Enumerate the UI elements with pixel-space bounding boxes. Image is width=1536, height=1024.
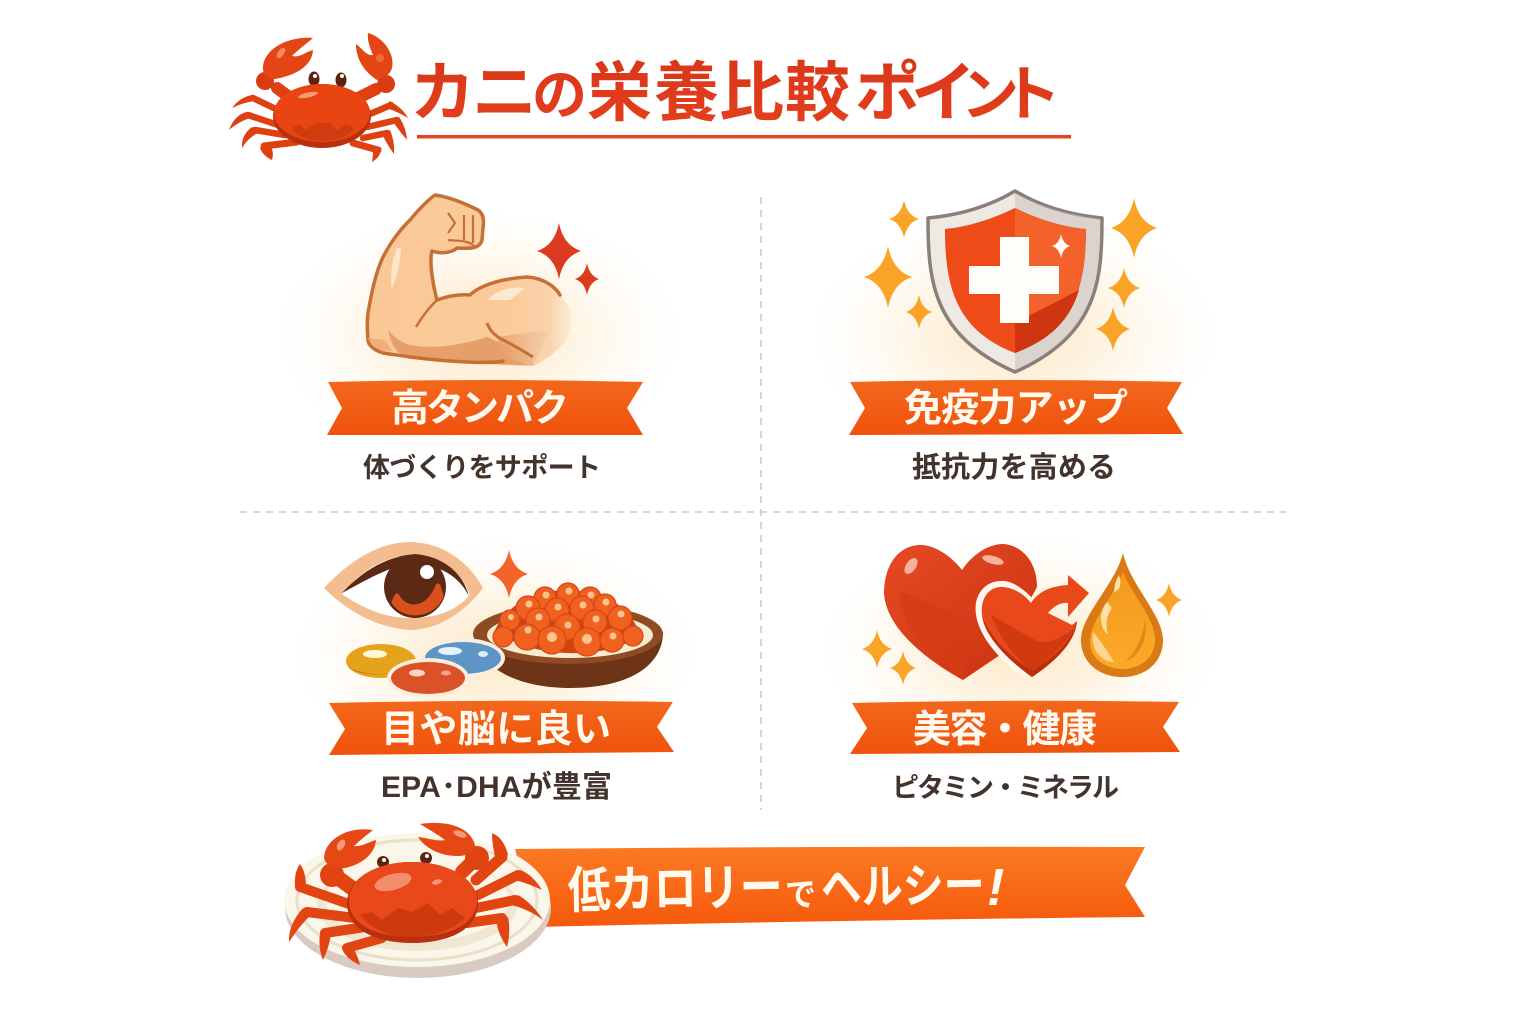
title: の bbox=[532, 64, 587, 126]
section glows bbox=[260, 200, 1235, 780]
icon: ikura bowl bbox=[473, 583, 663, 688]
ribbon: beauty and health bbox=[850, 701, 1180, 754]
ribbon: beauty and health: 美容・健康 bbox=[913, 709, 1097, 751]
title: カニ bbox=[410, 56, 537, 129]
caption: 体づくりをサポート bbox=[363, 453, 601, 483]
banner text: で bbox=[785, 876, 816, 913]
title: 栄養比較ポイ bbox=[587, 56, 976, 129]
panel: eyes and brain bbox=[324, 542, 674, 804]
banner text: ! bbox=[987, 859, 1004, 917]
icon: small heart with arrow bbox=[976, 575, 1089, 678]
icon: supplement capsules bbox=[346, 638, 505, 698]
bottom banner: low calorie bbox=[284, 823, 1145, 978]
banner text: 低カロリー bbox=[567, 859, 783, 919]
icon: sparkle bbox=[490, 550, 528, 598]
icon: sparkles bbox=[864, 198, 1157, 351]
panel: immunity bbox=[849, 191, 1183, 484]
header crab icon bbox=[229, 33, 408, 162]
ribbon: high protein: 高タンパク bbox=[391, 388, 569, 430]
ribbon: high protein bbox=[327, 380, 643, 435]
caption: 抵抗力を高める bbox=[912, 451, 1116, 484]
icon: eye bbox=[324, 542, 483, 630]
crab bbox=[289, 823, 543, 965]
ribbon: eyes and brain bbox=[329, 701, 674, 755]
banner text bbox=[567, 858, 1004, 919]
icon: sparkles bbox=[862, 583, 1182, 685]
panel: beauty and health bbox=[850, 544, 1182, 803]
caption: ピタミン・ミネラル bbox=[892, 773, 1119, 803]
ribbon: immunity bbox=[849, 380, 1183, 435]
ribbon: immunity: 免疫力アップ bbox=[904, 388, 1128, 430]
plate with crab bbox=[284, 823, 551, 978]
banner text: ヘルシー bbox=[820, 858, 985, 914]
panel: high protein bbox=[327, 195, 643, 483]
icon: oil drop bbox=[1081, 553, 1163, 677]
ribbon bbox=[515, 847, 1145, 927]
title underline bbox=[417, 135, 1071, 138]
ribbon: eyes and brain: 目や脳に良い bbox=[381, 709, 611, 751]
icon: big heart bbox=[884, 544, 1037, 680]
icon: shield bbox=[928, 191, 1102, 372]
title: ント bbox=[961, 61, 1061, 128]
grid dividers bbox=[240, 197, 1286, 810]
icon: flexed arm bbox=[367, 195, 572, 366]
caption: EPA･DHAが豊富 bbox=[381, 770, 612, 804]
icon: sparkles bbox=[537, 223, 599, 295]
